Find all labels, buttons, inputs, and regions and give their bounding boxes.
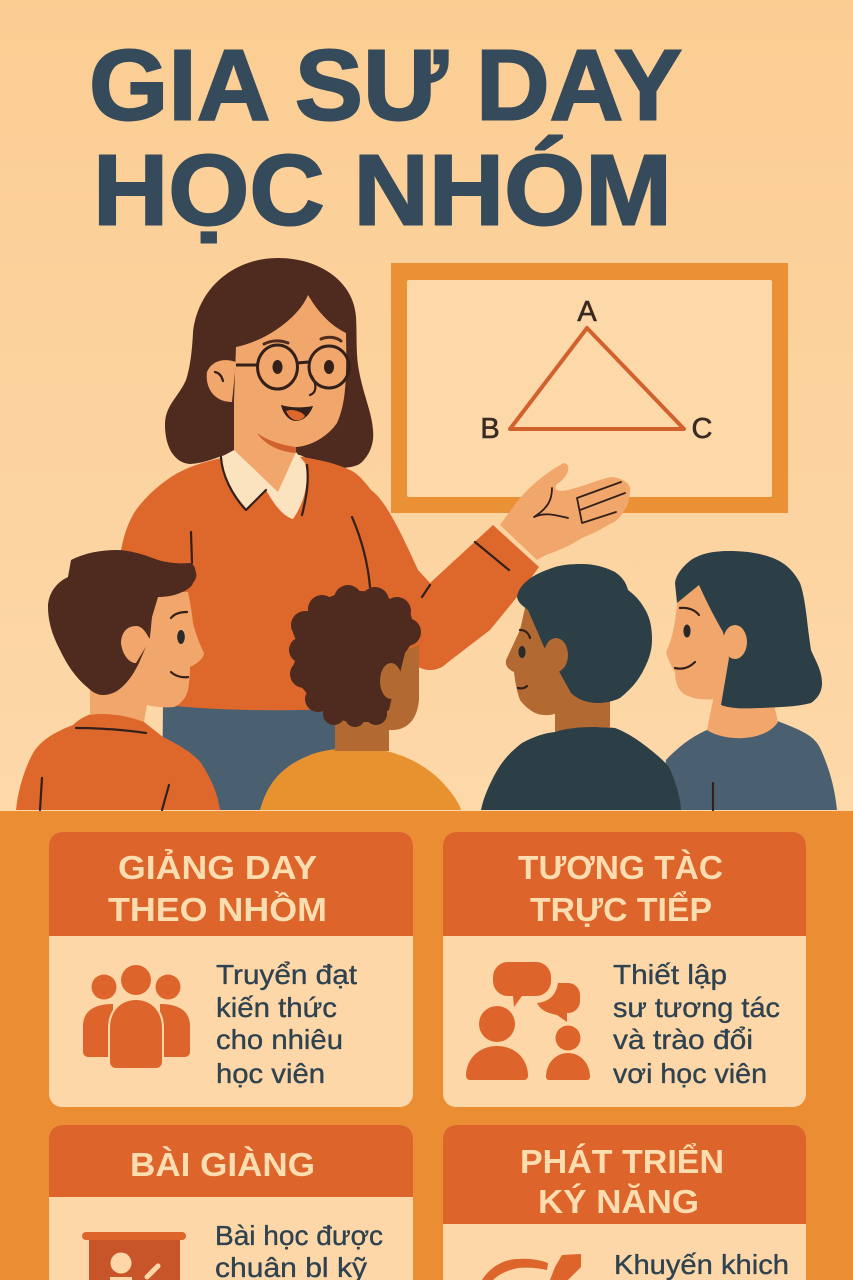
icon: conversation [466,962,590,1080]
whiteboard with triangle: A [577,296,597,328]
teacher face and neck [234,295,346,494]
hair [675,551,822,708]
student: left boy [16,550,220,810]
whiteboard with triangle: B [480,413,500,445]
face [125,592,204,707]
face [360,645,419,730]
title [89,30,682,246]
card text: vơi học viên [613,1058,767,1089]
card text: kiến thức [216,992,337,1023]
student: woman on the right [660,551,837,810]
card heading: BÀI GIÀNG [130,1146,315,1183]
ear [121,626,150,663]
title: GIA SƯ DAY [89,30,682,142]
card text: Truyển đạt [216,959,357,990]
neck [555,695,610,732]
card text: Thiết lập [613,959,727,990]
card text: học viên [216,1058,325,1089]
hair [48,550,196,695]
card text: và trào đổi [613,1024,753,1055]
card text: sư tương tác [613,992,780,1023]
ear [723,625,747,659]
card heading [108,849,327,928]
whiteboard with triangle [391,263,788,513]
neck [90,665,150,722]
card text [613,959,780,1089]
teacher hair [165,258,373,468]
card heading: TƯƠNG TÀC [518,849,723,886]
icon: growth arrow [482,1254,581,1280]
teacher eyes, brows, nose [264,337,341,395]
teacher sweater creases [191,517,509,597]
hair [517,564,652,703]
icon: group of people [83,965,190,1068]
hair [289,585,421,727]
ear [380,663,402,699]
title: HỌC NHÓM [93,134,672,246]
card heading: TRỰC TIỂP [530,891,712,928]
card heading [518,849,723,928]
card text: Khuyến khich [614,1249,789,1280]
teacher [121,258,630,810]
chin shadow [257,433,296,453]
teacher ear [207,360,236,402]
ear [544,638,568,672]
teacher collar [221,450,307,519]
face [666,585,745,699]
card: Giảng dạy theo nhóm [49,832,413,1107]
card: Phát triển kỹ năng [443,1125,806,1280]
card heading [520,1143,724,1220]
card heading: GIẢNG DAY [118,849,317,886]
neck [335,715,389,751]
bottom panel [0,811,853,1280]
card text: cho nhiêu [216,1024,343,1055]
neck [707,690,778,738]
card text: Bài học được [215,1220,383,1251]
teacher mouth [281,405,313,421]
shirt [660,720,837,810]
student: curly-haired boy [260,585,461,810]
card heading: PHÁT TRIỂN [520,1143,724,1180]
teacher hand [500,463,630,560]
teacher glasses [236,345,349,389]
whiteboard with triangle: C [692,413,712,445]
shirt [260,748,461,810]
card heading: KÝ NĂNG [538,1183,699,1220]
face details [675,608,699,669]
icon: presentation board [82,1232,186,1280]
shirt [481,727,681,810]
shirt [16,712,220,810]
face [506,608,585,715]
card text [216,959,357,1089]
card: Bài giảng [49,1125,413,1280]
card: Tương tác trực tiếp [443,832,806,1107]
face details [518,630,530,688]
card text [215,1220,383,1280]
teacher trousers [162,704,340,810]
student: boy with dark hair [481,564,681,810]
face details [171,612,188,677]
teacher sweater and arm [121,457,539,710]
card heading: THEO NHỒM [108,891,327,928]
